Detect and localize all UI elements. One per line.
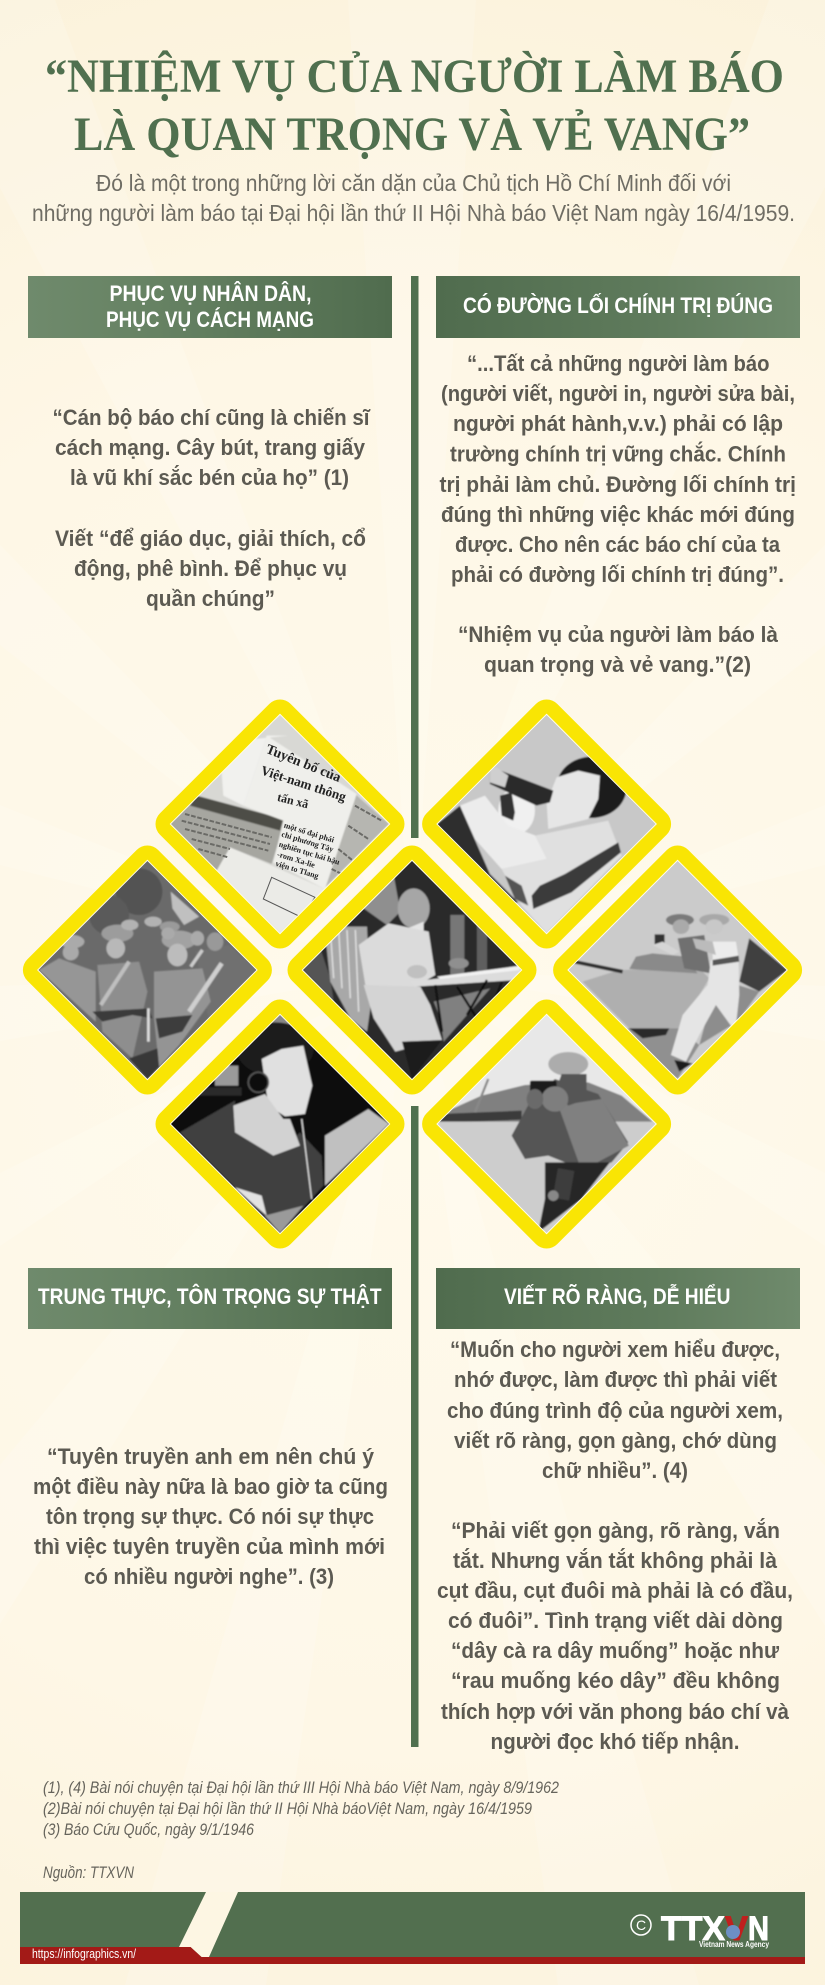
photo: newspapers: viện to Tlang [274,859,320,881]
quote text [437,1337,793,1754]
photo: soldiers marching [22,845,272,1095]
quote text: trường chính trị vững chắc. Chính [450,442,786,466]
photo: newspapers: Tuyên bố của [264,742,343,786]
photo: cameraman with telephoto lens [422,699,672,949]
center divider lower [411,1106,418,1747]
quote text: được. Cho nên các báo chí của ta [455,532,781,557]
title: LÀ QUAN TRỌNG VÀ VẺ VANG” [74,108,750,161]
source: Nguồn: TTXVN [43,1863,135,1882]
quote text: “...Tất cả những người làm báo [467,351,770,376]
footnotes: (1), (4) Bài nói chuyện tại Đại hội lần thứ III Hội Nhà báo Việt Nam, ngày 8/9/1962 [43,1778,559,1797]
quote text: người phát hành,v.v.) phải có lập [453,411,783,436]
photo: newspapers: một số đại phái [283,821,336,845]
heading bar [436,276,800,338]
quote text [33,1444,388,1589]
quote text: động, phê bình. Để phục vụ [74,556,347,581]
quote text: Viết “để giáo dục, giải thích, cổ [55,526,366,551]
heading bar [436,1268,800,1329]
quote text: “Phải viết gọn gàng, rõ ràng, vắn [451,1518,780,1543]
logo: TTXVN: TTX [661,1910,725,1948]
logo: TTXVN: C [636,1917,646,1933]
heading bar: PHỤC VỤ NHÂN DÂN, [110,281,312,306]
quote text: viết rõ ràng, gọn gàng, chớ dùng [454,1428,777,1453]
quote text: là vũ khí sắc bén của họ” (1) [70,465,349,490]
subtitle: Đó là một trong những lời căn dặn của Chủ tịch Hồ Chí Minh đối với [96,170,731,196]
quote text [52,405,371,611]
heading bar: VIẾT RÕ RÀNG, DỄ HIỂU [504,1283,730,1309]
quote text: “Tuyên truyền anh em nên chú ý [47,1444,375,1469]
quote text: một điều này nữa là bao giờ ta cũng [33,1474,388,1499]
quote text: cách mạng. Cây bút, trang giấy [55,435,366,460]
quote text: thì việc tuyên truyền của mình mới [34,1534,385,1559]
logo: TTXVN: V [725,1910,748,1948]
heading bar [28,276,392,338]
heading bar: CÓ ĐƯỜNG LỐI CHÍNH TRỊ ĐÚNG [463,292,773,318]
footnotes: (2)Bài nói chuyện tại Đại hội lần thứ II Hội Nhà báoViệt Nam, ngày 16/4/1959 [43,1799,532,1818]
title: “NHIỆM VỤ CỦA NGƯỜI LÀM BÁO [45,49,784,103]
quote text: “rau muống kéo dây” đều không [451,1668,780,1693]
quote text: “Muốn cho người xem hiểu được, [450,1337,780,1362]
quote text: trị phải làm chủ. Đường lối chính trị [440,472,796,497]
quote text: thích hợp với văn phong báo chí và [441,1699,790,1724]
quote text: quần chúng” [146,586,275,611]
heading bar [28,1268,392,1329]
quote text: cụt đầu, cụt đuôi mà phải là có đầu, [437,1578,793,1603]
photo: President Ho Chi Minh writing [287,845,537,1095]
quote text: “Nhiệm vụ của người làm báo là [458,622,779,647]
photo: newspapers: -rom Xa-lie [276,850,317,870]
subtitle [32,170,795,226]
panel: correct political line [436,276,800,677]
title [45,49,784,161]
quote text: “Cán bộ báo chí cũng là chiến sĩ [52,405,371,430]
photo cluster [22,699,803,1249]
photo: newspapers: nghiên tục hải hậu [278,840,341,867]
photo: newspapers: tấn xã [276,790,310,811]
quote text: đúng thì những việc khác mới đúng [441,502,795,527]
footnotes [43,1778,559,1839]
photo: newspapers: chi phương Tây [280,830,335,854]
photo: newspapers: Việt-nam thông [259,763,348,804]
photo: photographer in a field [422,999,672,1249]
heading bar: TRUNG THỰC, TÔN TRỌNG SỰ THẬT [38,1284,382,1309]
panel: serve the people [28,276,392,611]
quote text [440,351,796,677]
quote text: quan trọng và vẻ vang.”(2) [484,652,751,677]
panel: clear writing [436,1268,800,1754]
footer band [20,1892,805,1964]
footnotes: (3) Báo Cứu Quốc, ngày 9/1/1946 [43,1820,254,1839]
quote text: nhớ được, làm được thì phải viết [454,1367,778,1392]
quote text: “dây cà ra dây muống” hoặc như [451,1638,779,1663]
quote text: tắt. Nhưng vắn tắt không phải là [453,1548,778,1573]
quote text: cho đúng trình độ của người xem, [447,1398,783,1423]
logo: TTXVN: Vietnam News Agency [699,1940,769,1949]
quote text: (người viết, người in, người sửa bài, [441,381,795,406]
quote text: người đọc khó tiếp nhận. [490,1729,740,1754]
heading bar: PHỤC VỤ CÁCH MẠNG [106,307,314,332]
quote text: có đuôi”. Tình trạng viết dài dòng [448,1608,783,1633]
website url: https://infographics.vn/ [32,1946,136,1961]
center divider upper [411,276,418,838]
photo: newspapers [155,699,405,949]
logo: TTXVN: N [748,1910,769,1948]
logo: TTXVN [631,1910,769,1949]
photo: two reporters on a tank [553,845,803,1095]
quote text: tôn trọng sự thực. Có nói sự thực [46,1504,374,1529]
quote text: chữ nhiều”. (4) [542,1458,688,1483]
photo: radio operator with headphones [155,999,405,1249]
quote text: phải có đường lối chính trị đúng”. [451,562,784,587]
quote text: có nhiều người nghe”. (3) [84,1564,334,1589]
panel: honesty and truth [28,1268,392,1589]
